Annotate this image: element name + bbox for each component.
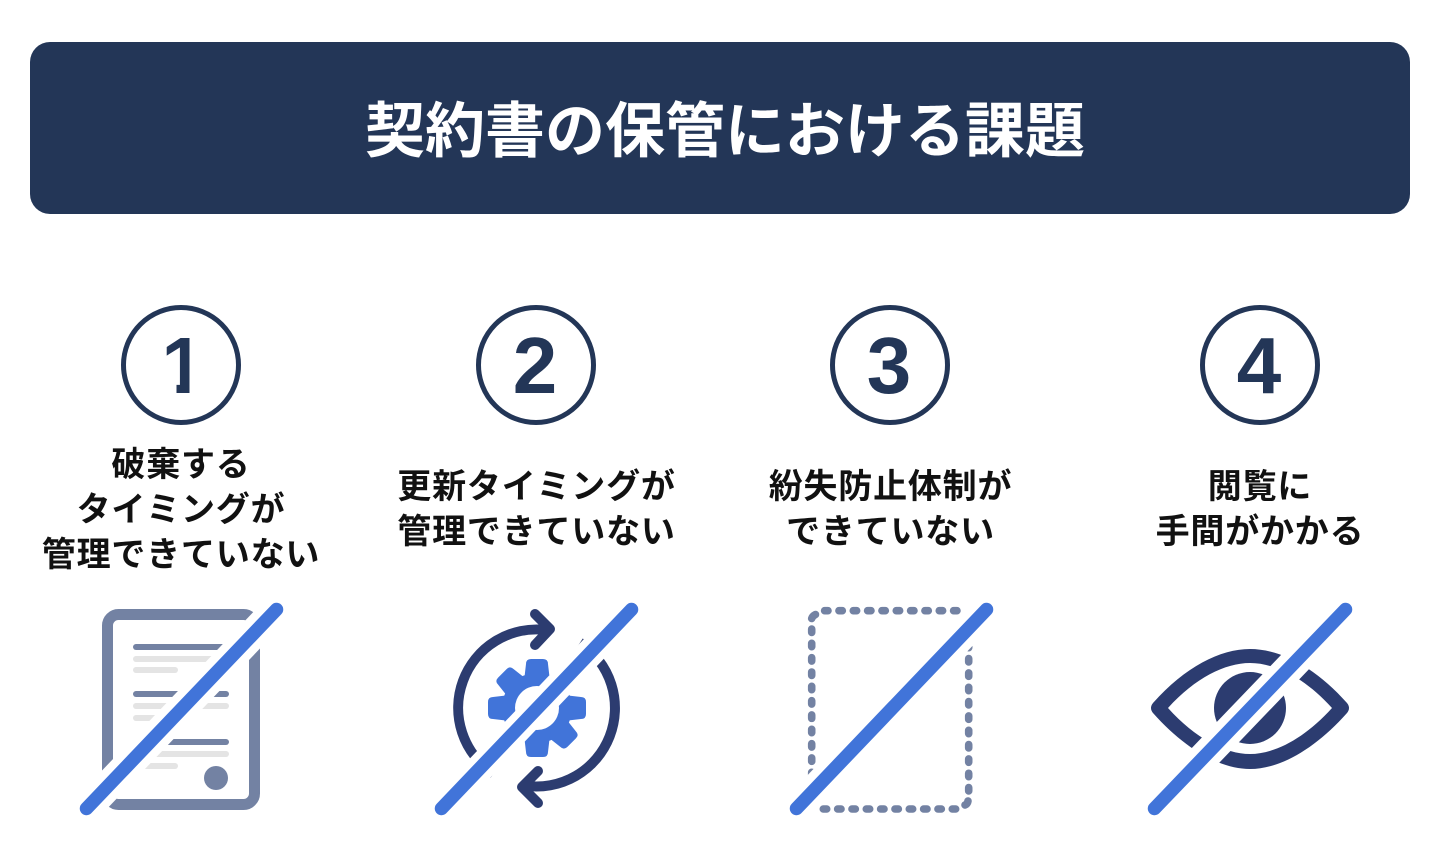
number badge 1: 1 xyxy=(161,321,206,410)
number badge 4 xyxy=(1202,308,1318,422)
icon: crossed-out missing document outline xyxy=(786,598,997,820)
label: item 1: タイミングが xyxy=(77,482,285,531)
number badge 3: 3 xyxy=(867,321,911,410)
label: item 2: 更新タイミングが xyxy=(397,459,676,508)
icon: crossed-out contract document xyxy=(76,598,287,820)
title banner xyxy=(30,42,1410,214)
label: item 4: 手間がかかる xyxy=(1156,504,1364,553)
number badge 2: 2 xyxy=(513,321,557,410)
icon: crossed-out renewal cycle with gear xyxy=(431,598,642,820)
label: item 2 xyxy=(397,459,676,553)
number badge 2 xyxy=(478,308,594,422)
title banner: 契約書の保管における課題 xyxy=(365,83,1085,170)
label: item 4: 閲覧に xyxy=(1208,459,1312,508)
label: item 2: 管理できていない xyxy=(397,504,676,553)
number badge 1 xyxy=(124,308,238,422)
label: item 3: できていない xyxy=(786,504,995,553)
number badge 3 xyxy=(832,308,948,422)
icon: crossed-out eye xyxy=(1144,598,1356,820)
label: item 3: 紛失防止体制が xyxy=(769,459,1012,508)
number badge 4: 4 xyxy=(1237,321,1282,410)
illustrations xyxy=(80,305,1352,816)
label: item 1: 管理できていない xyxy=(42,527,320,576)
label: item 4 xyxy=(1156,459,1364,553)
label: item 1: 破棄する xyxy=(111,437,251,486)
label: item 1 xyxy=(42,437,320,576)
label: item 3 xyxy=(769,459,1012,553)
